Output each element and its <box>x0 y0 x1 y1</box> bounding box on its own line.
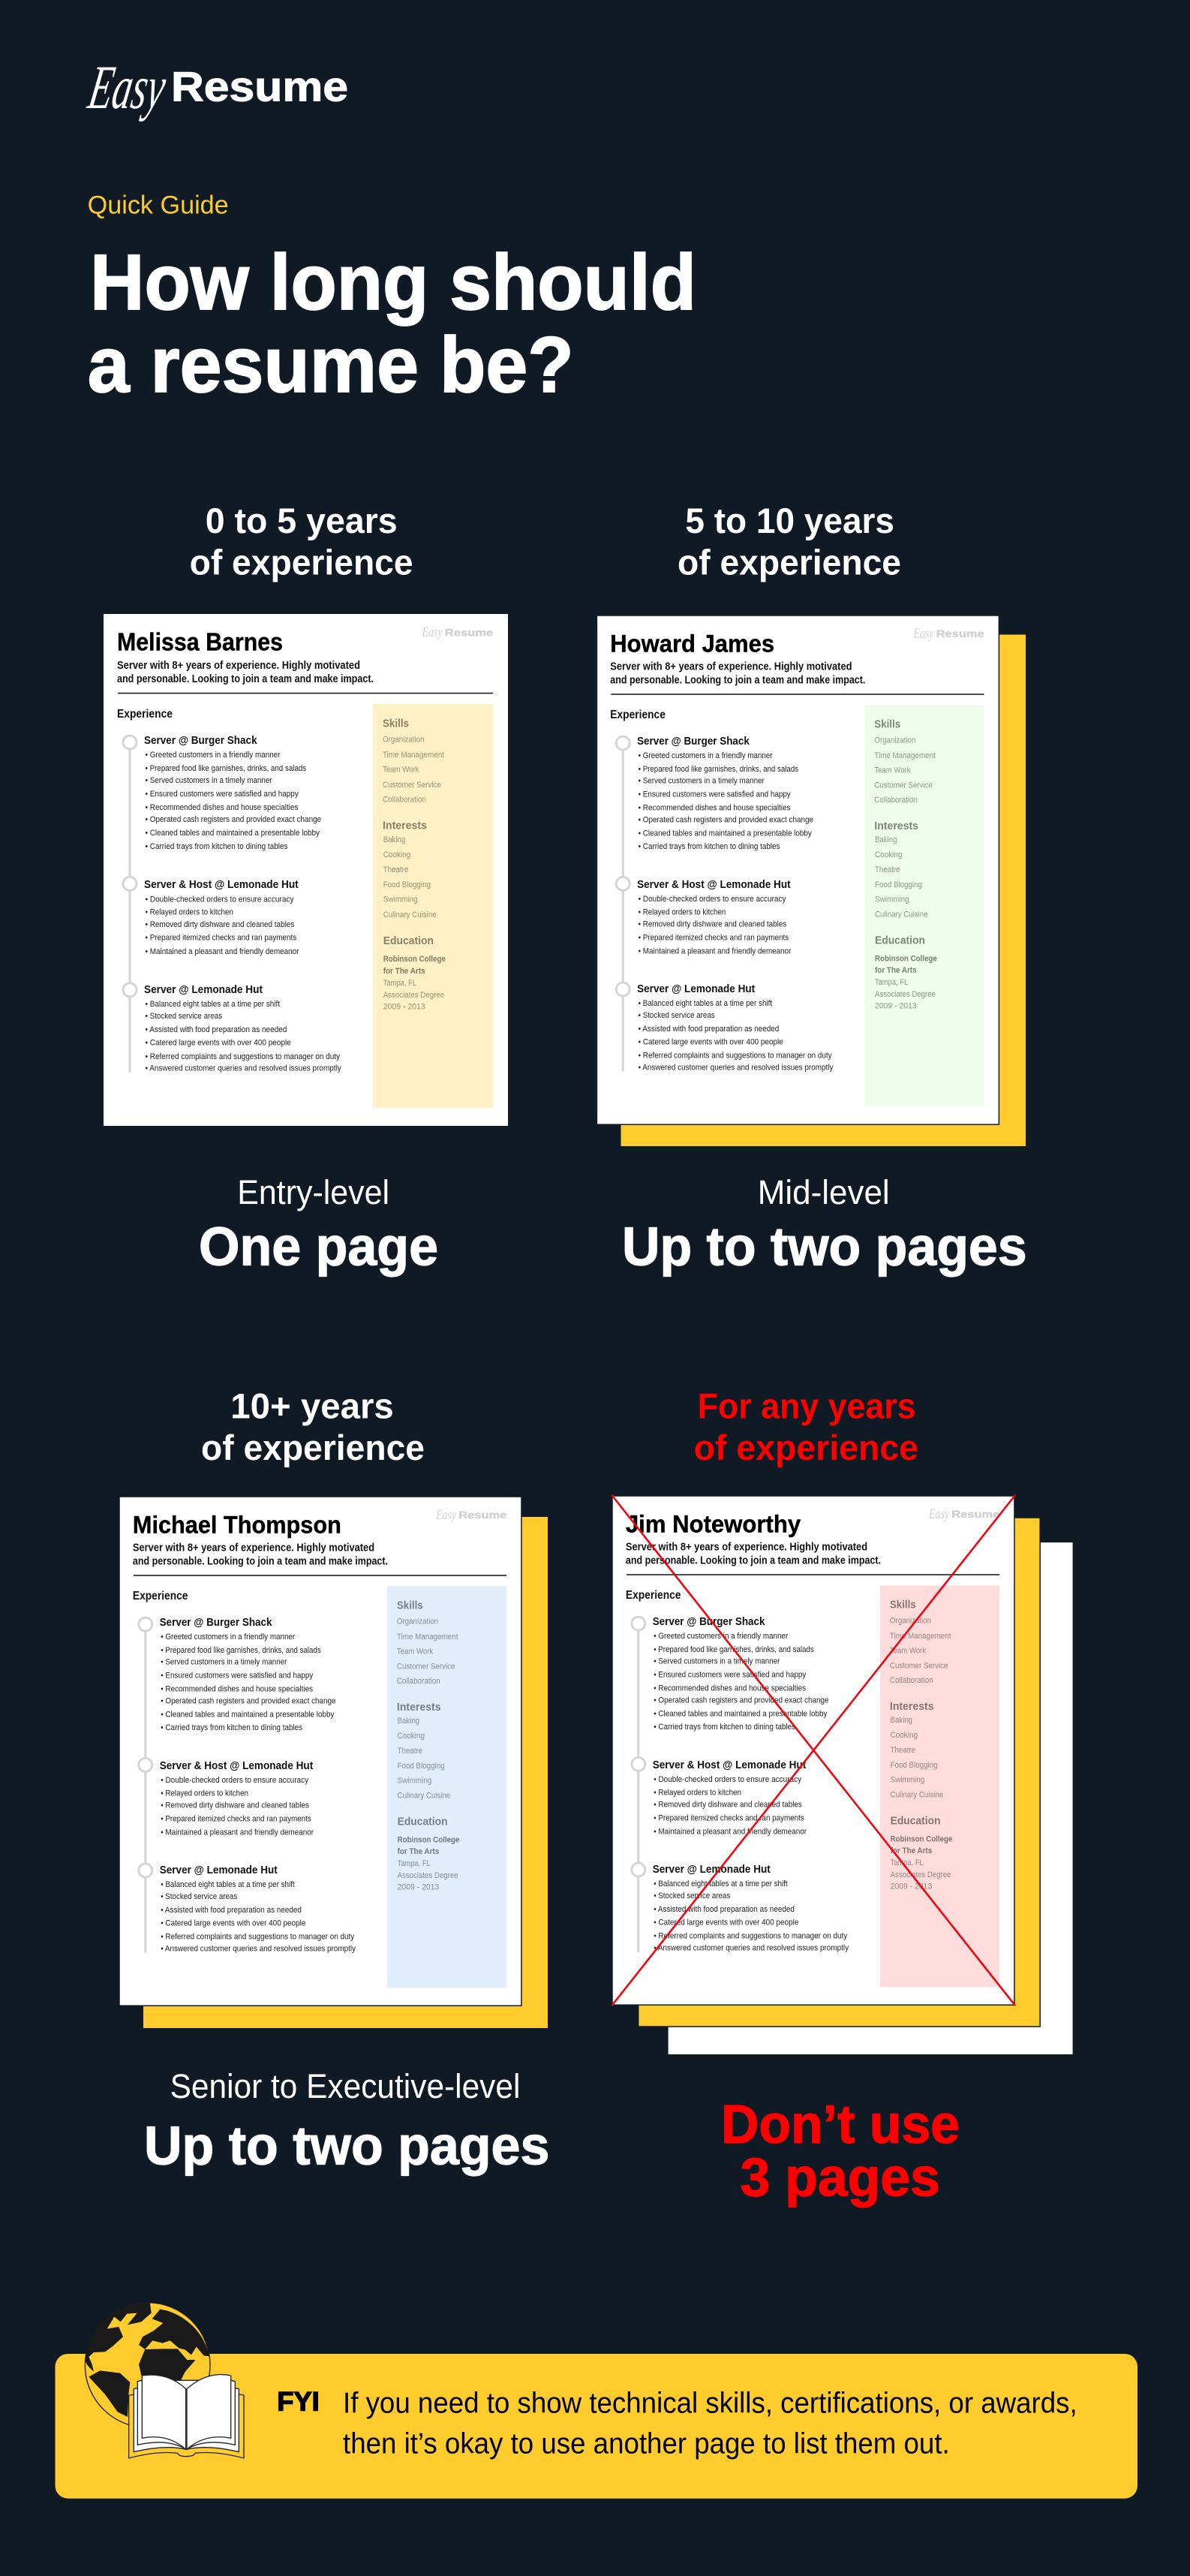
job: Server at Burger Shack: Server @ Burger Shack <box>160 1617 272 1629</box>
timeline <box>632 1617 645 1952</box>
job: Server at Lemonade Hut: • Assisted with food preparation as needed <box>654 1905 795 1914</box>
sidebar: Skills <box>890 1599 916 1612</box>
job: Server and Host at Lemonade Hut: • Relayed orders to kitchen <box>654 1788 741 1797</box>
job: Server and Host at Lemonade Hut: • Maintained a pleasant and friendly demeanor <box>161 1828 314 1837</box>
caption: Mid-level: Mid-level <box>758 1173 890 1211</box>
sidebar: Baking <box>875 835 897 844</box>
job: Server at Lemonade Hut: Server @ Lemonade Hut <box>637 983 755 995</box>
title: a resume be? <box>88 321 574 409</box>
icon: red cross over resume <box>612 1495 1015 2006</box>
sidebar <box>387 1586 506 1988</box>
job: Server and Host at Lemonade Hut: • Maintained a pleasant and friendly demeanor <box>639 946 792 955</box>
job: Server at Lemonade Hut: • Assisted with food preparation as needed <box>146 1025 287 1034</box>
panel: one page resume <box>104 614 508 1126</box>
heading: 10+ years: 10+ years <box>230 1386 394 1425</box>
sidebar: 2009 - 2013 <box>891 1882 932 1891</box>
warning: Don't use 3 pages <box>721 2095 960 2208</box>
resume name: Michael Thompson <box>133 1510 341 1538</box>
heading: 5 to 10 years: of experience <box>678 543 901 582</box>
resume logo: Easy <box>422 624 443 640</box>
job: Server at Burger Shack: • Served customers in a timely manner <box>654 1657 780 1666</box>
job: Server at Burger Shack: • Recommended dishes and house specialties <box>639 804 791 813</box>
sidebar: Culinary Cuisine <box>875 910 928 919</box>
sidebar: 2009 - 2013 <box>875 1002 917 1011</box>
sidebar: Swimming <box>891 1776 924 1785</box>
sidebar: Cooking <box>875 850 902 859</box>
sidebar: Associates Degree <box>875 990 936 999</box>
sidebar: for The Arts <box>398 1847 439 1856</box>
title: How long should <box>90 239 696 327</box>
job: Server at Lemonade Hut: • Stocked service areas <box>639 1011 715 1020</box>
sidebar: Education <box>875 935 925 947</box>
sidebar: Organization <box>397 1618 438 1627</box>
tagline <box>117 660 374 685</box>
job: Server and Host at Lemonade Hut <box>144 878 299 956</box>
sidebar <box>864 705 984 1106</box>
job: Server at Burger Shack: • Operated cash registers and provided exact change <box>639 815 813 824</box>
sidebar: Skills <box>874 719 900 731</box>
sidebar: 2009 - 2013 <box>383 1003 425 1012</box>
sidebar: Customer Service <box>890 1662 948 1671</box>
globe <box>85 2303 210 2427</box>
panel: senior resume <box>119 1497 521 2006</box>
job: Server at Lemonade Hut: • Referred complaints and suggestions to manager on duty <box>654 1932 848 1941</box>
job: Server at Burger Shack: • Carried trays from kitchen to dining tables <box>639 842 780 851</box>
job: Server at Burger Shack: • Recommended dishes and house specialties <box>161 1685 313 1694</box>
sidebar: Robinson College <box>383 955 446 964</box>
warning: Don't use 3 pages: 3 pages <box>740 2148 940 2208</box>
panel: crossed-out resume <box>612 1496 1014 2005</box>
tagline: and personable. Looking to join a team and make impact. <box>626 1554 881 1566</box>
page sheet <box>597 615 999 1124</box>
back page: white, third page <box>669 1542 1073 2054</box>
job: Server and Host at Lemonade Hut: Server & Host @ Lemonade Hut <box>160 1760 313 1772</box>
resume logo: Easy <box>435 1507 456 1523</box>
job: Server and Host at Lemonade Hut: Server & Host @ Lemonade Hut <box>637 879 791 891</box>
sidebar: Collaboration <box>397 1677 440 1686</box>
sidebar: Food Blogging <box>398 1762 445 1771</box>
heading: 10+ years: of experience <box>201 1428 425 1467</box>
job: Server at Lemonade Hut: • Stocked service areas <box>654 1891 731 1900</box>
job: Server at Lemonade Hut: • Referred complaints and suggestions to manager on duty <box>161 1933 355 1942</box>
resume name: Melissa Barnes <box>117 628 283 656</box>
tagline: Server with 8+ years of experience. Highly motivated <box>626 1542 867 1554</box>
job: Server at Burger Shack: • Served customers in a timely manner <box>639 777 765 786</box>
result: Up to two pages: Up to two pages <box>622 1217 1027 1277</box>
sidebar: Theatre <box>398 1747 422 1756</box>
sidebar: Robinson College <box>875 954 937 963</box>
job: Server and Host at Lemonade Hut: • Double-checked orders to ensure accuracy <box>146 895 294 904</box>
job: Server and Host at Lemonade Hut: • Prepared itemized checks and ran payments <box>161 1814 311 1823</box>
FYI text: then it’s okay to use another page to list them out. <box>343 2427 950 2460</box>
job: Server at Lemonade Hut: • Balanced eight tables at a time per shift <box>161 1880 295 1889</box>
job: Server and Host at Lemonade Hut: Server & Host @ Lemonade Hut <box>653 1759 806 1771</box>
experience heading: Experience <box>133 1590 188 1602</box>
job: Server at Lemonade Hut: • Catered large events with over 400 people <box>146 1039 291 1048</box>
job: Server and Host at Lemonade Hut: • Prepared itemized checks and ran payments <box>146 934 296 943</box>
job: Server at Lemonade Hut: Server @ Lemonade Hut <box>144 983 263 996</box>
job: Server and Host at Lemonade Hut: Server & Host @ Lemonade Hut <box>144 878 299 891</box>
sidebar: Tampa, FL <box>891 1858 924 1867</box>
job: Server at Burger Shack: • Greeted customers in a friendly manner <box>639 751 773 760</box>
sidebar: Food Blogging <box>875 880 922 889</box>
page sheet <box>104 614 508 1126</box>
sidebar: Cooking <box>891 1731 918 1740</box>
sidebar: Food Blogging <box>891 1761 938 1770</box>
job: Server at Lemonade Hut: • Answered customer queries and resolved issues promptly <box>161 1944 356 1953</box>
job: Server at Lemonade Hut: • Referred complaints and suggestions to manager on duty <box>639 1052 832 1061</box>
sidebar: Education <box>398 1816 448 1828</box>
job: Server and Host at Lemonade Hut: • Prepared itemized checks and ran payments <box>639 933 789 942</box>
experience heading: Experience <box>610 709 666 721</box>
sidebar: Skills <box>397 1600 423 1612</box>
page sheet <box>119 1497 521 2006</box>
job: Server and Host at Lemonade Hut: • Removed dirty dishware and cleaned tables <box>639 919 787 928</box>
sidebar: Customer Service <box>397 1663 455 1672</box>
job: Server and Host at Lemonade Hut: • Removed dirty dishware and cleaned tables <box>654 1800 802 1809</box>
job: Server and Host at Lemonade Hut: • Double-checked orders to ensure accuracy <box>639 895 786 904</box>
sidebar: Team Work <box>383 766 419 775</box>
heading: 0 to 5 years: of experience <box>190 543 413 582</box>
job: Server at Burger Shack: • Prepared food like garnishes, drinks, and salads <box>654 1645 814 1654</box>
job: Server at Burger Shack <box>653 1616 829 1732</box>
sidebar: Interests <box>874 820 918 832</box>
job: Server at Lemonade Hut: • Balanced eight tables at a time per shift <box>639 999 773 1008</box>
sidebar: Associates Degree <box>891 1870 951 1879</box>
sidebar: Customer Service <box>874 781 933 790</box>
job: Server at Lemonade Hut: Server @ Lemonade Hut <box>160 1864 278 1876</box>
panel: FYI banner <box>56 2354 1137 2499</box>
job: Server at Burger Shack: • Served customers in a timely manner <box>146 776 272 785</box>
logo: Easy Resume: Resume <box>171 62 348 110</box>
job: Server and Host at Lemonade Hut <box>637 879 792 955</box>
sidebar: Education <box>891 1816 941 1828</box>
resume logo <box>422 624 493 640</box>
job: Server at Burger Shack <box>637 736 813 851</box>
job: Server at Burger Shack: • Operated cash registers and provided exact change <box>146 815 321 824</box>
job: Server at Lemonade Hut: • Assisted with food preparation as needed <box>639 1025 779 1034</box>
sidebar: Skills <box>383 718 409 730</box>
job: Server at Lemonade Hut: • Catered large events with over 400 people <box>161 1918 305 1927</box>
job: Server at Burger Shack: Server @ Burger Shack <box>653 1616 765 1628</box>
heading: 10+ years <box>201 1386 425 1467</box>
job: Server at Burger Shack: Server @ Burger Shack <box>144 734 257 747</box>
tagline: Server with 8+ years of experience. Highly motivated <box>610 661 852 673</box>
sidebar: Interests <box>397 1702 441 1714</box>
logo: Easy Resume <box>83 53 348 122</box>
job: Server at Burger Shack: • Greeted customers in a friendly manner <box>146 751 281 760</box>
job: Server at Burger Shack: • Carried trays from kitchen to dining tables <box>146 842 288 851</box>
heading: 0 to 5 years: 0 to 5 years <box>206 501 398 540</box>
job: Server at Burger Shack: • Carried trays from kitchen to dining tables <box>161 1723 302 1732</box>
sidebar: Cooking <box>383 850 410 859</box>
job: Server at Lemonade Hut <box>144 983 341 1073</box>
job: Server at Burger Shack: • Prepared food like garnishes, drinks, and salads <box>161 1646 321 1655</box>
sidebar: Culinary Cuisine <box>383 910 437 919</box>
sidebar: Team Work <box>890 1646 927 1655</box>
resume logo: Resume <box>445 626 493 638</box>
job: Server at Burger Shack: • Recommended dishes and house specialties <box>146 803 299 812</box>
sidebar: Tampa, FL <box>398 1859 431 1868</box>
sidebar: Associates Degree <box>398 1871 458 1880</box>
resume logo: Resume <box>936 627 984 639</box>
FYI text <box>343 2387 1077 2460</box>
sidebar: Time Management <box>874 751 936 760</box>
resume logo <box>913 626 984 642</box>
heading: For any years <box>694 1386 918 1467</box>
heading: 0 to 5 years <box>190 501 413 582</box>
sidebar: Associates Degree <box>383 991 444 1000</box>
panel: mid-level resume <box>597 615 999 1124</box>
job: Server at Lemonade Hut: • Answered customer queries and resolved issues promptly <box>654 1943 849 1952</box>
job: Server at Burger Shack: • Greeted customers in a friendly manner <box>654 1632 788 1641</box>
result: Up to two pages: Up to two pages <box>144 2116 549 2176</box>
timeline <box>123 736 137 1073</box>
sidebar: Tampa, FL <box>875 978 908 987</box>
tagline: and personable. Looking to join a team and make impact. <box>117 673 374 685</box>
job: Server at Burger Shack: • Ensured customers were satisfied and happy <box>654 1671 807 1680</box>
sidebar: Time Management <box>383 751 444 760</box>
job: Server and Host at Lemonade Hut: • Relayed orders to kitchen <box>161 1789 248 1798</box>
job: Server at Lemonade Hut: • Answered customer queries and resolved issues promptly <box>639 1063 834 1072</box>
sidebar: Organization <box>874 736 916 745</box>
experience heading: Experience <box>117 708 173 721</box>
sidebar: Baking <box>383 835 405 844</box>
job: Server at Burger Shack: • Ensured customers were satisfied and happy <box>639 790 791 799</box>
job: Server at Burger Shack: • Cleaned tables and maintained a presentable lobby <box>146 829 320 838</box>
sidebar: for The Arts <box>875 966 917 975</box>
job: Server and Host at Lemonade Hut: • Double-checked orders to ensure accuracy <box>161 1776 308 1785</box>
FYI text: If you need to show technical skills, certifications, or awards, <box>343 2387 1077 2419</box>
tagline: and personable. Looking to join a team and make impact. <box>133 1555 388 1567</box>
job: Server at Burger Shack: • Greeted customers in a friendly manner <box>161 1633 295 1642</box>
job: Server at Burger Shack: • Cleaned tables and maintained a presentable lobby <box>161 1710 335 1719</box>
job: Server at Burger Shack: • Cleaned tables and maintained a presentable lobby <box>654 1709 828 1718</box>
job: Server at Burger Shack: • Ensured customers were satisfied and happy <box>146 790 299 799</box>
FYI label: FYI <box>277 2388 320 2417</box>
warning: Don't use 3 pages: Don’t use <box>721 2095 960 2155</box>
job: Server at Lemonade Hut: • Assisted with food preparation as needed <box>161 1906 302 1915</box>
sidebar: Baking <box>891 1716 912 1725</box>
job: Server and Host at Lemonade Hut: • Removed dirty dishware and cleaned tables <box>146 920 295 929</box>
job: Server at Burger Shack: • Carried trays from kitchen to dining tables <box>654 1723 795 1732</box>
resume logo <box>435 1507 507 1523</box>
result: One page: One page <box>199 1217 438 1277</box>
eyebrow: Quick Guide: Quick Guide <box>88 191 229 220</box>
job: Server at Lemonade Hut: • Catered large events with over 400 people <box>639 1037 783 1046</box>
sidebar: Customer Service <box>383 781 441 790</box>
resume name: Howard James <box>610 629 774 657</box>
sidebar: Time Management <box>397 1633 458 1642</box>
tagline <box>133 1542 388 1567</box>
tagline: Server with 8+ years of experience. Highly motivated <box>117 660 360 672</box>
resume logo: Easy <box>913 626 934 642</box>
back page: yellow, senior <box>143 1517 548 2028</box>
job: Server at Burger Shack: • Operated cash registers and provided exact change <box>161 1696 336 1705</box>
timeline <box>139 1618 152 1953</box>
job: Server and Host at Lemonade Hut: • Maintained a pleasant and friendly demeanor <box>146 947 299 956</box>
job: Server at Lemonade Hut: • Answered customer queries and resolved issues promptly <box>146 1064 341 1073</box>
job: Server at Burger Shack: Server @ Burger Shack <box>637 736 750 748</box>
sidebar: Team Work <box>874 766 911 775</box>
sidebar: Theatre <box>875 865 900 874</box>
sidebar: Time Management <box>890 1632 951 1641</box>
sidebar: Cooking <box>398 1732 425 1741</box>
sidebar: Food Blogging <box>383 880 431 889</box>
tagline <box>626 1542 881 1566</box>
sidebar: Team Work <box>397 1647 434 1656</box>
back page: yellow, mid-level <box>621 635 1026 1146</box>
job: Server at Burger Shack: • Cleaned tables and maintained a presentable lobby <box>639 829 812 838</box>
job: Server at Burger Shack: • Prepared food like garnishes, drinks, and salads <box>146 764 306 773</box>
job: Server and Host at Lemonade Hut <box>160 1760 314 1837</box>
page sheet <box>612 1496 1014 2005</box>
job: Server at Lemonade Hut: • Balanced eight tables at a time per shift <box>146 1000 281 1009</box>
sidebar: Collaboration <box>383 796 426 805</box>
timeline <box>616 736 630 1072</box>
sidebar: Organization <box>383 736 425 745</box>
job: Server and Host at Lemonade Hut: • Removed dirty dishware and cleaned tables <box>161 1801 309 1810</box>
sidebar: Interests <box>383 820 427 832</box>
job: Server at Lemonade Hut <box>637 983 834 1072</box>
icon: globe and open book <box>85 2303 244 2458</box>
heading: For any years: For any years <box>698 1386 916 1425</box>
tagline: and personable. Looking to join a team and make impact. <box>610 674 865 686</box>
sidebar: Culinary Cuisine <box>891 1791 943 1800</box>
sidebar: Collaboration <box>874 796 918 805</box>
sidebar: Swimming <box>398 1777 431 1786</box>
job: Server at Lemonade Hut: • Stocked service areas <box>161 1892 238 1901</box>
back page: yellow, second page <box>639 1518 1040 2027</box>
job: Server and Host at Lemonade Hut: • Relayed orders to kitchen <box>146 908 233 917</box>
job: Server at Lemonade Hut <box>160 1864 356 1953</box>
sidebar: for The Arts <box>383 967 425 976</box>
job: Server at Burger Shack: • Served customers in a timely manner <box>161 1658 287 1667</box>
sidebar: Interests <box>890 1701 934 1713</box>
sidebar: Swimming <box>383 895 418 904</box>
sidebar: Education <box>383 935 434 947</box>
resume logo: Resume <box>458 1509 507 1521</box>
experience heading: Experience <box>626 1589 681 1602</box>
sidebar: 2009 - 2013 <box>398 1883 439 1892</box>
sidebar: Robinson College <box>398 1835 459 1844</box>
job: Server at Burger Shack: • Prepared food like garnishes, drinks, and salads <box>639 765 798 774</box>
resume name: Jim Noteworthy <box>626 1509 801 1537</box>
heading: 5 to 10 years: 5 to 10 years <box>685 501 894 540</box>
sidebar <box>373 704 493 1108</box>
heading: For any years: of experience <box>694 1428 918 1467</box>
sidebar: Swimming <box>875 895 909 904</box>
open book <box>129 2375 244 2458</box>
caption: Senior to Executive-level: Senior to Executive-level <box>170 2067 520 2105</box>
sidebar: Robinson College <box>891 1834 952 1843</box>
job: Server and Host at Lemonade Hut <box>653 1759 807 1836</box>
job: Server at Burger Shack <box>160 1617 336 1732</box>
sidebar <box>880 1585 999 1987</box>
job: Server at Lemonade Hut: • Referred complaints and suggestions to manager on duty <box>146 1052 340 1061</box>
sidebar: Tampa, FL <box>383 979 416 988</box>
job: Server at Burger Shack <box>144 734 321 851</box>
job: Server and Host at Lemonade Hut: • Double-checked orders to ensure accuracy <box>654 1775 801 1784</box>
title <box>88 239 696 409</box>
heading: 5 to 10 years <box>678 501 901 582</box>
job: Server at Lemonade Hut: • Catered large events with over 400 people <box>654 1918 798 1927</box>
job: Server at Lemonade Hut <box>653 1864 849 1952</box>
job: Server at Burger Shack: • Operated cash registers and provided exact change <box>654 1696 829 1705</box>
sidebar: Theatre <box>383 865 408 874</box>
sidebar: Collaboration <box>890 1676 933 1685</box>
sidebar: for The Arts <box>891 1846 932 1855</box>
sidebar: Theatre <box>891 1746 915 1755</box>
job: Server at Lemonade Hut: • Stocked service areas <box>146 1012 222 1021</box>
tagline <box>610 661 865 686</box>
job: Server at Burger Shack: • Ensured customers were satisfied and happy <box>161 1672 314 1681</box>
job: Server at Burger Shack: • Recommended dishes and house specialties <box>654 1684 806 1693</box>
job: Server and Host at Lemonade Hut: • Relayed orders to kitchen <box>639 907 726 916</box>
job: Server and Host at Lemonade Hut: • Maintained a pleasant and friendly demeanor <box>654 1827 807 1836</box>
tagline: Server with 8+ years of experience. Highly motivated <box>133 1542 374 1554</box>
resume logo: Resume <box>951 1508 1000 1520</box>
sidebar: Baking <box>398 1717 419 1726</box>
logo: Easy Resume: Easy <box>83 53 171 122</box>
caption: Entry-level: Entry-level <box>237 1173 389 1211</box>
resume logo <box>928 1506 1000 1522</box>
sidebar: Culinary Cuisine <box>398 1792 450 1801</box>
job: Server at Lemonade Hut: Server @ Lemonade Hut <box>653 1864 771 1876</box>
resume logo: Easy <box>928 1506 949 1522</box>
sidebar: Organization <box>890 1617 931 1626</box>
job: Server and Host at Lemonade Hut: • Prepared itemized checks and ran payments <box>654 1813 804 1822</box>
job: Server at Lemonade Hut: • Balanced eight tables at a time per shift <box>654 1879 788 1888</box>
